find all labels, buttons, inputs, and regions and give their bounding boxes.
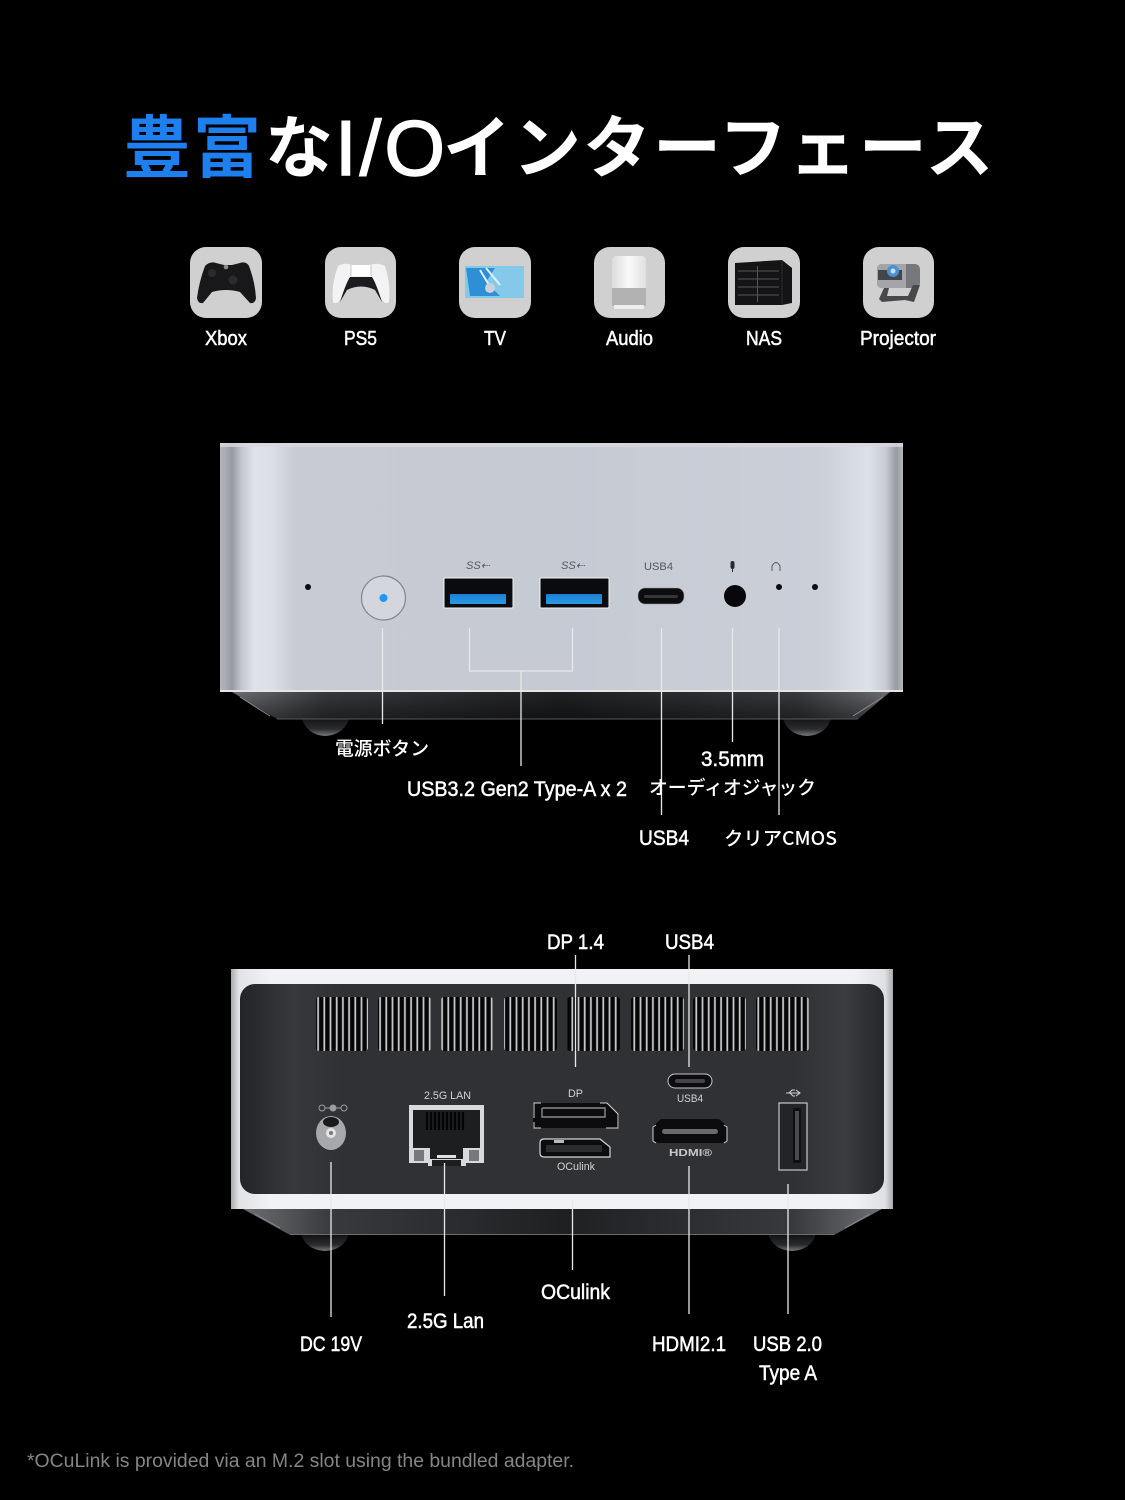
label: USB4 front: USB4 [639, 827, 689, 850]
device compatibility row [190, 247, 936, 350]
front base [232, 692, 890, 719]
pinhole left [305, 584, 311, 590]
foot right [782, 716, 832, 736]
icon: TV [459, 247, 531, 318]
icon: PS5 controller [325, 247, 396, 318]
DisplayPort port [533, 1103, 619, 1128]
label: Type A: Type A [759, 1362, 817, 1385]
front view of device [220, 443, 903, 736]
foot right [768, 1234, 816, 1251]
DC jack [316, 1116, 346, 1150]
HDMI logo: HDMI® [669, 1148, 713, 1159]
title: な [265, 93, 335, 192]
LAN port [409, 1105, 484, 1166]
icon: Xbox controller [190, 247, 262, 318]
mic icon [730, 561, 734, 572]
rear callout lines [331, 955, 788, 1317]
front callout lines [382, 628, 779, 815]
label: DP 1.4: DP 1.4 [547, 931, 604, 954]
label: HDMI2.1: HDMI2.1 [652, 1333, 726, 1356]
label: USB 2.0: USB 2.0 [753, 1333, 822, 1356]
label: TV: TV [484, 328, 507, 350]
rear dark panel [240, 984, 884, 1194]
label: power button: 電源ボタン [335, 734, 429, 761]
vents [316, 997, 809, 1051]
SS USB mark 2: SS⇠ [561, 560, 586, 572]
label: Projector: Projector [860, 328, 936, 350]
power button [362, 576, 406, 620]
footnote: *OCuLink is provided via an M.2 slot using the bundled adapter. [27, 1451, 574, 1472]
audio jack [724, 585, 746, 607]
label: USB4 rear: USB4 [665, 931, 714, 954]
USB-A port 2 [540, 578, 609, 608]
label: Audio: Audio [606, 328, 653, 350]
USB4 rear port [668, 1074, 712, 1088]
front aluminium body [220, 443, 903, 692]
label: DC 19V: DC 19V [300, 1333, 362, 1356]
USB-A rear port [779, 1103, 807, 1170]
HDMI port [653, 1119, 727, 1143]
LAN silk label: 2.5G LAN [424, 1090, 471, 1102]
label: Xbox: Xbox [205, 328, 247, 350]
foot left [301, 716, 350, 736]
title: I/O [335, 104, 448, 192]
front labels [335, 734, 837, 851]
pinhole right [812, 584, 818, 590]
USB4 silk label rear: USB4 [677, 1093, 703, 1105]
rear base [243, 1209, 882, 1235]
label: USB3.2: USB3.2 Gen2 Type-A x 2 [407, 778, 627, 801]
icon: projector [863, 247, 934, 318]
icon: NAS [728, 247, 800, 318]
label: audio jack: オーディオジャック [649, 773, 816, 800]
label: 3.5mm: 3.5mm [701, 748, 764, 771]
USB-A port 1 [444, 578, 513, 608]
OCulink silk label: OCulink [557, 1161, 595, 1173]
foot left [301, 1234, 349, 1251]
title: インターフェース [443, 93, 996, 192]
DP silk label: DP [568, 1088, 583, 1100]
headphone icon [772, 562, 780, 571]
label: NAS: NAS [746, 328, 782, 350]
rear labels [300, 931, 822, 1385]
SS USB mark 1: SS⇠ [466, 560, 491, 572]
label: 2.5G Lan: 2.5G Lan [407, 1310, 484, 1333]
USB4 silk label: USB4 [644, 561, 673, 573]
title: 豊富 [123, 93, 263, 192]
rear aluminium body [231, 969, 893, 1209]
USB icon [786, 1090, 800, 1096]
rear view of device [231, 969, 893, 1251]
icon: audio speaker [594, 247, 665, 318]
label: OCulink: OCulink [541, 1281, 610, 1304]
OCulink port [540, 1139, 610, 1157]
DC polarity icon [319, 1105, 347, 1111]
USB-C port [638, 588, 684, 604]
label: PS5: PS5 [344, 328, 377, 350]
label: clear CMOS: クリアCMOS [724, 824, 837, 851]
pinhole CMOS [776, 584, 782, 590]
